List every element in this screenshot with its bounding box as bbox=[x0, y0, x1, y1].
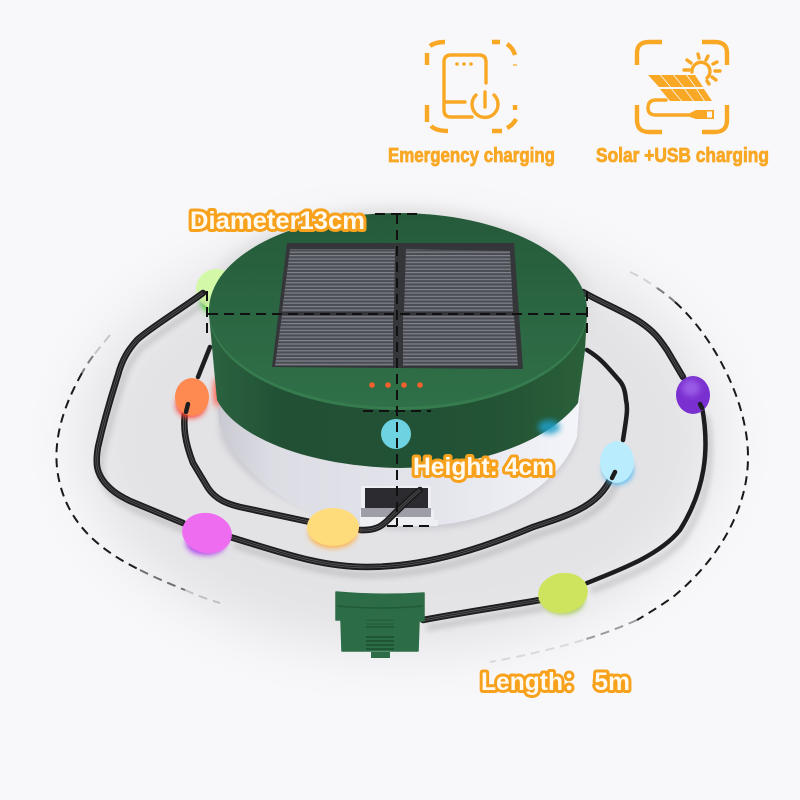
red glow on body bbox=[213, 377, 221, 407]
lime bulb bbox=[535, 569, 591, 617]
purple bulb bbox=[676, 376, 710, 414]
charge indicator LEDs bbox=[369, 382, 423, 388]
blue glow on skirt bbox=[538, 420, 560, 434]
light blue bulb bbox=[600, 441, 634, 484]
solar cells bbox=[275, 249, 518, 366]
solar panel bbox=[648, 75, 712, 101]
caption: solar and USB charging: Solar +USB charging bbox=[596, 145, 769, 167]
yellow bulb bbox=[307, 508, 359, 548]
power bank outline bbox=[444, 55, 486, 117]
dashed length arc: left bbox=[56, 335, 220, 603]
green skirt bbox=[209, 314, 587, 468]
cable port bbox=[360, 486, 438, 526]
green lid rim bbox=[209, 216, 587, 410]
dashed length arc: right bbox=[490, 272, 748, 662]
dashed focus corners bbox=[427, 42, 516, 131]
sun bbox=[692, 62, 710, 78]
inner cable into port bbox=[360, 490, 420, 530]
label: diameter: Diameter13cm bbox=[190, 207, 365, 235]
body shadow bbox=[217, 400, 580, 530]
green connector bbox=[336, 592, 424, 658]
base unit bbox=[209, 213, 587, 530]
focus corners bbox=[637, 42, 727, 132]
label: length: Length： 5m bbox=[481, 668, 630, 696]
outer cable bbox=[97, 292, 706, 620]
dashed dimension lines bbox=[207, 214, 587, 526]
cable shadow bbox=[101, 301, 710, 628]
icon: emergency charging bbox=[427, 42, 517, 131]
green bulb behind disk bbox=[196, 269, 236, 313]
pink bulb bbox=[179, 509, 235, 557]
connector vents bbox=[366, 620, 394, 649]
power button bbox=[381, 419, 411, 449]
orange bulb bbox=[175, 378, 209, 418]
green lid top bbox=[209, 213, 587, 407]
USB cable bbox=[648, 100, 692, 115]
inner cable left bbox=[184, 347, 310, 522]
label: height: Height: 4cm bbox=[413, 453, 554, 481]
status dots bbox=[455, 62, 473, 66]
solar panel frame bbox=[272, 243, 523, 369]
power symbol bbox=[472, 92, 498, 117]
caption: emergency charging: Emergency charging bbox=[388, 145, 555, 167]
icon: solar and USB charging bbox=[637, 42, 727, 132]
white lower body bbox=[217, 395, 580, 526]
